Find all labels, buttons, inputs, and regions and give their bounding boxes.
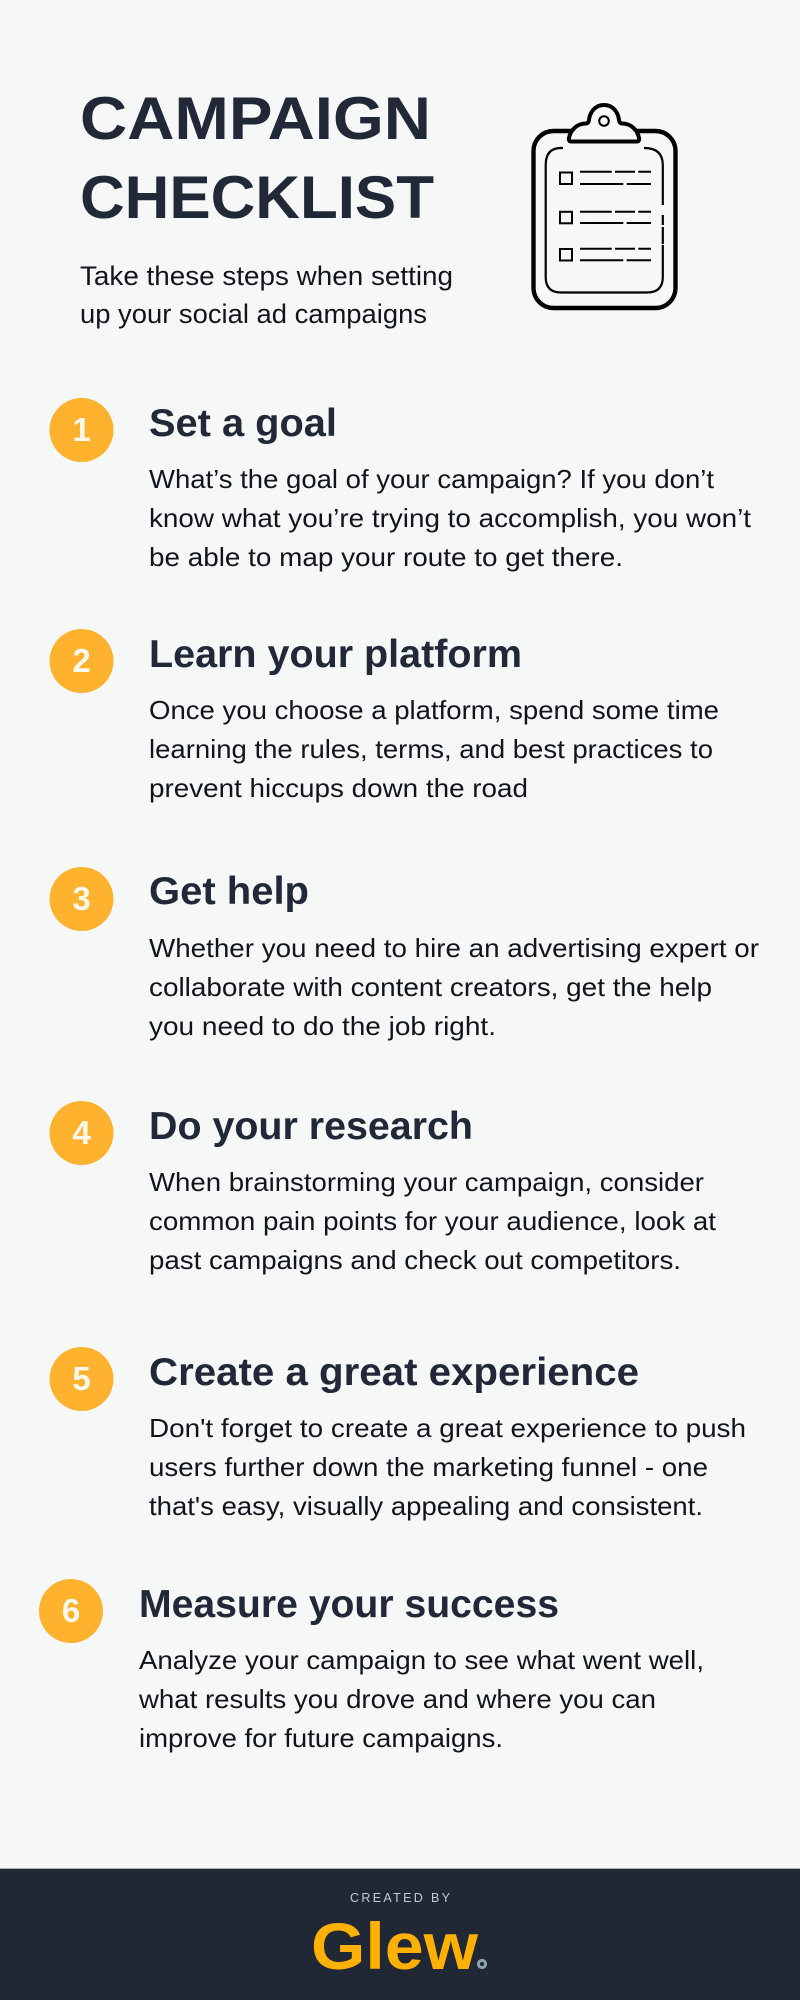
body: do your research: common pain points for your audience, look at — [149, 1206, 717, 1236]
title — [80, 85, 434, 231]
number badge 5: 5 — [72, 1360, 91, 1397]
footer — [0, 1868, 800, 2000]
body: do your research — [149, 1167, 717, 1275]
body: set a goal — [149, 464, 752, 572]
body: get help: Whether you need to hire an advertising expert or — [149, 933, 759, 963]
subtitle: up your social ad campaigns — [80, 299, 427, 329]
heading: do your research: Do your research — [149, 1105, 473, 1148]
body: measure your success: what results you drove and where you can — [138, 1684, 656, 1714]
body: set a goal: What’s the goal of your campaign? If you don’t — [149, 464, 715, 494]
heading: create a great experience: Create a great experience — [149, 1351, 639, 1394]
body: set a goal: know what you’re trying to accomplish, you won’t — [149, 503, 752, 533]
step 3: get help — [50, 867, 759, 1041]
heading: measure your success: Measure your success — [139, 1583, 559, 1626]
body: measure your success — [138, 1645, 704, 1753]
title: CAMPAIGN — [80, 85, 431, 152]
step 5: create a great experience — [50, 1347, 746, 1521]
title: CHECKLIST — [80, 164, 434, 231]
step 6: measure your success — [39, 1579, 704, 1753]
number badge 3 — [50, 867, 114, 931]
icon: clipboard — [534, 105, 676, 308]
body: create a great experience: users further down the marketing funnel - one — [149, 1452, 708, 1482]
body: do your research: past campaigns and check out competitors. — [149, 1245, 681, 1275]
number badge 2 — [50, 629, 114, 693]
step 4: do your research — [50, 1101, 717, 1275]
body: measure your success: Analyze your campaign to see what went well, — [139, 1645, 704, 1675]
subtitle — [80, 261, 453, 329]
heading: learn your platform: Learn your platform — [149, 633, 522, 676]
number badge 1: 1 — [72, 411, 91, 448]
body: get help — [149, 933, 759, 1041]
body: create a great experience: Don't forget to create a great experience to push — [149, 1413, 746, 1443]
body: create a great experience — [149, 1413, 746, 1521]
body: get help: you need to do the job right. — [149, 1011, 496, 1041]
body: measure your success: improve for future campaigns. — [139, 1723, 503, 1753]
step 2: learn your platform — [50, 629, 719, 803]
number badge 3: 3 — [72, 880, 91, 917]
number badge 2: 2 — [72, 642, 91, 679]
number badge 4 — [50, 1101, 114, 1165]
body: learn your platform: prevent hiccups down the road — [149, 773, 528, 803]
body: set a goal: be able to map your route to get there. — [149, 542, 623, 572]
subtitle: Take these steps when setting — [80, 261, 453, 291]
body: create a great experience: that's easy, visually appealing and consistent. — [149, 1491, 703, 1521]
number badge 1 — [50, 398, 114, 462]
body: get help: collaborate with content creators, get the help — [149, 972, 712, 1002]
heading: get help: Get help — [149, 870, 309, 913]
body: learn your platform — [149, 695, 719, 803]
body: learn your platform: Once you choose a platform, spend some time — [149, 695, 719, 725]
number badge 4: 4 — [72, 1114, 91, 1151]
body: do your research: When brainstorming your campaign, consider — [149, 1167, 704, 1197]
logo: Glew: Glew — [311, 1909, 479, 1983]
number badge 6 — [39, 1579, 103, 1643]
number badge 5 — [50, 1347, 114, 1411]
step 1: set a goal — [50, 398, 752, 572]
body: learn your platform: learning the rules, terms, and best practices to — [149, 734, 713, 764]
footer label: created by: CREATED BY — [350, 1891, 451, 1905]
heading: set a goal: Set a goal — [149, 402, 337, 445]
number badge 6: 6 — [62, 1592, 80, 1629]
